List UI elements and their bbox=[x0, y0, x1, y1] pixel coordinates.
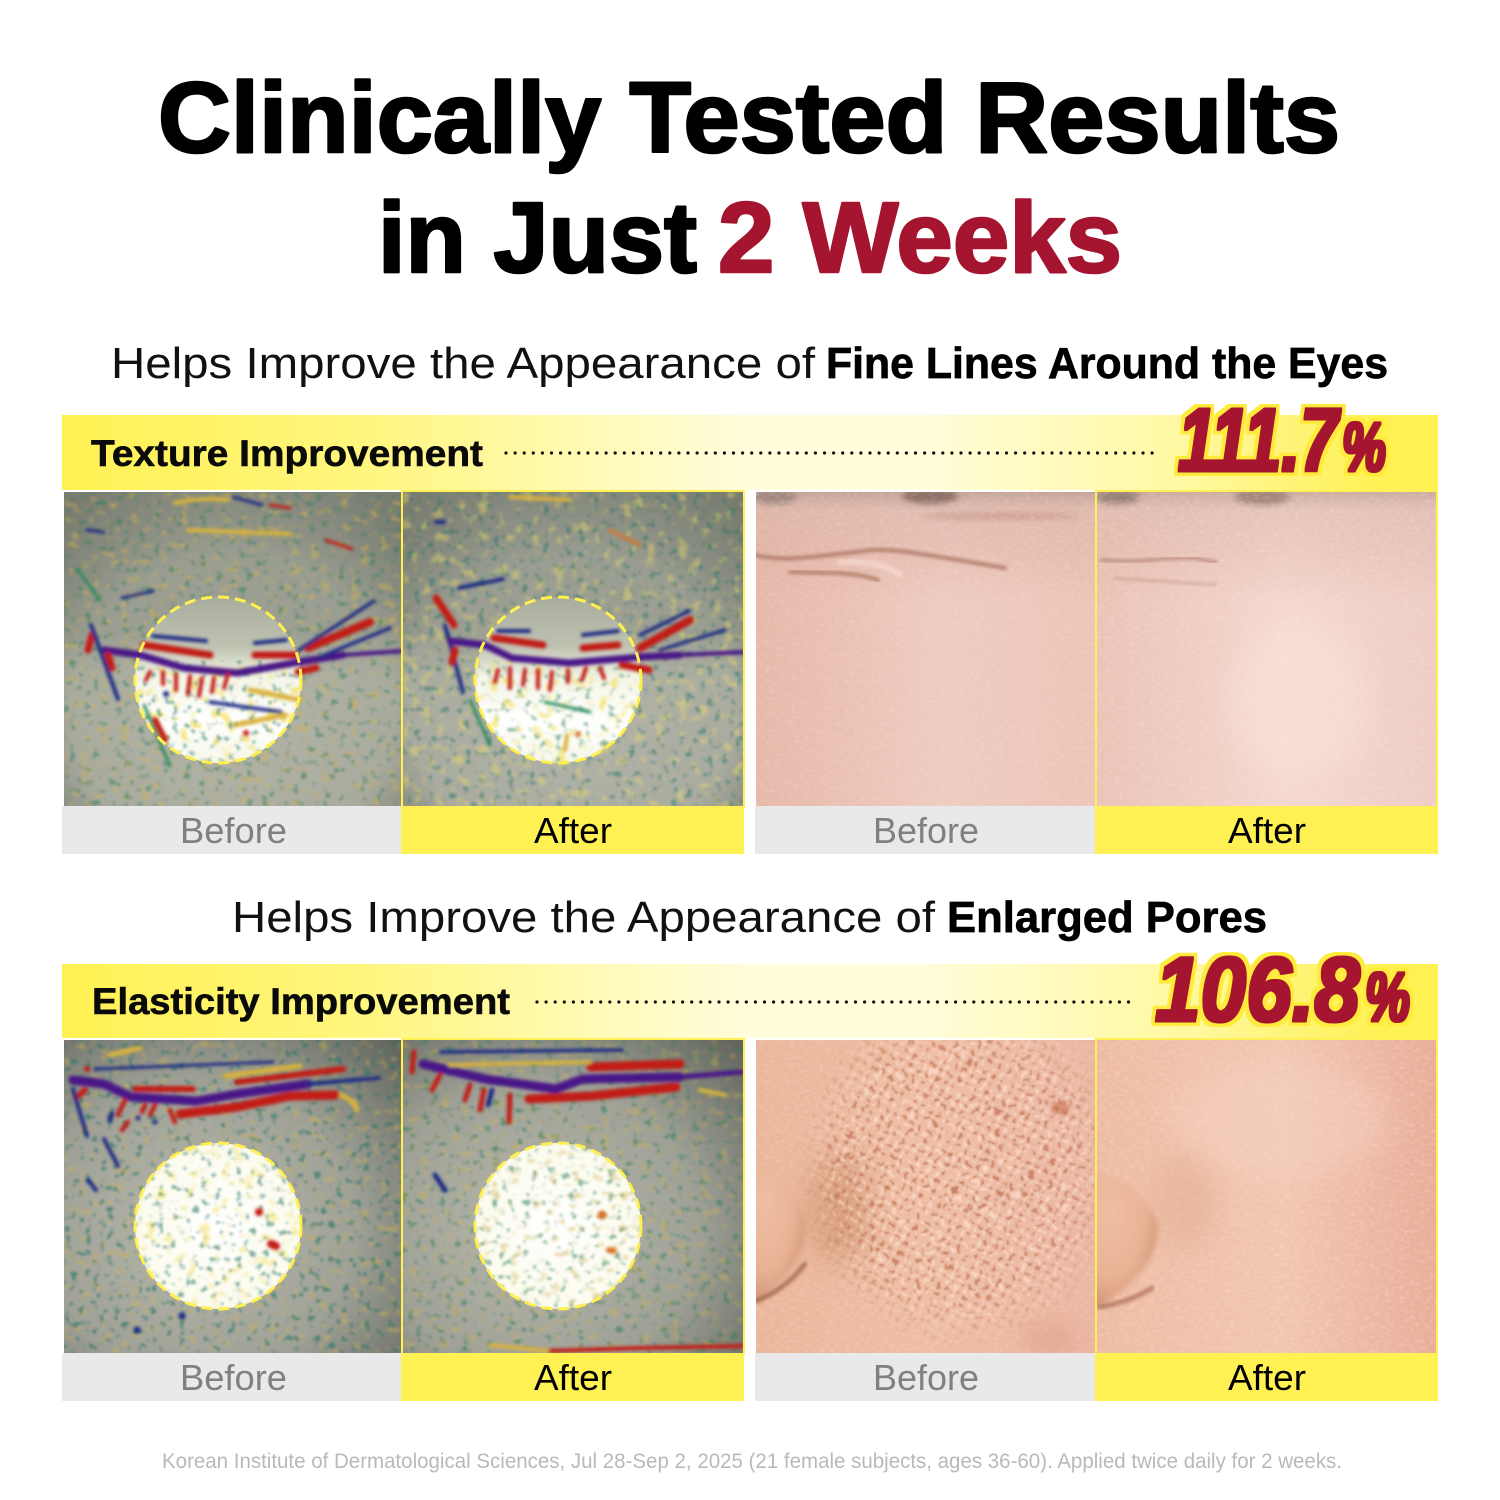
caption strip: texture before skin: Before bbox=[873, 810, 979, 851]
magnifier ring bbox=[475, 597, 641, 763]
stat: 111.7%: 111.7 bbox=[1178, 391, 1341, 491]
caption strip: pores after skin bbox=[1095, 1353, 1438, 1401]
title: 2 Weeks bbox=[718, 182, 1122, 294]
subheading: fine lines: Fine Lines Around the Eyes bbox=[826, 339, 1388, 388]
caption strip: texture before map: Before bbox=[180, 810, 287, 851]
panel: texture after map bbox=[403, 492, 746, 806]
caption strip: pores before skin bbox=[755, 1353, 1095, 1401]
panel: pores before skin photo bbox=[745, 1040, 1095, 1354]
caption strip: pores after skin: After bbox=[1228, 1357, 1306, 1398]
subheading: enlarged pores: Helps Improve the Appearance of bbox=[232, 893, 936, 942]
label: texture improvement: Texture Improvement bbox=[91, 433, 483, 474]
icon: nose wing bbox=[756, 1169, 808, 1306]
caption strip: elasticity before map: Before bbox=[180, 1357, 287, 1398]
magnifier ring bbox=[475, 1143, 641, 1309]
panel: pores after skin photo bbox=[1086, 1040, 1436, 1353]
result bar: texture improvement bbox=[62, 391, 1438, 491]
stat: 106.8%: % bbox=[1365, 958, 1410, 1036]
panel: texture before map bbox=[64, 492, 403, 806]
magnifier ring bbox=[135, 1143, 301, 1309]
caption strip: texture after map: After bbox=[534, 810, 612, 851]
icon: nose wing bbox=[1097, 1174, 1160, 1311]
label: elasticity improvement: Elasticity Improvement bbox=[92, 981, 510, 1022]
panel: texture after skin photo bbox=[1096, 489, 1436, 806]
result bar: elasticity improvement bbox=[62, 939, 1438, 1041]
magnifier ring bbox=[135, 597, 301, 763]
title: Clinically Tested Results bbox=[158, 62, 1340, 174]
caption strip: texture after skin bbox=[1095, 806, 1438, 854]
stat: 106.8%: 106.8 bbox=[1155, 939, 1361, 1041]
after panel frame lines bbox=[402, 491, 1437, 1354]
panel: elasticity before map bbox=[64, 1040, 401, 1353]
caption strip: elasticity after map bbox=[401, 1353, 744, 1401]
subheading: enlarged pores bbox=[232, 893, 1267, 942]
caption strip: pores before skin: Before bbox=[873, 1357, 979, 1398]
caption strip: texture after map bbox=[401, 806, 744, 854]
panel: elasticity after map bbox=[403, 1040, 743, 1353]
subheading: fine lines: Helps Improve the Appearance of bbox=[111, 339, 816, 388]
caption strip: texture before map bbox=[62, 806, 401, 854]
footnote: Korean Institute of Dermatological Sciences, Jul 28-Sep 2, 2025 (21 female subjects, ages 36-60). Applied twice daily for 2 weeks. bbox=[162, 1450, 1342, 1473]
title: in Just bbox=[378, 182, 697, 294]
panel: texture before skin photo bbox=[753, 488, 1095, 806]
title bbox=[158, 62, 1340, 294]
subheading: enlarged pores: Enlarged Pores bbox=[947, 893, 1267, 942]
subheading: fine lines bbox=[111, 339, 1388, 388]
caption strip: texture after skin: After bbox=[1228, 810, 1306, 851]
caption strip: texture before skin bbox=[755, 806, 1095, 854]
stat: 111.7%: % bbox=[1342, 408, 1386, 486]
caption strip: elasticity after map: After bbox=[534, 1357, 612, 1398]
caption strip: elasticity before map bbox=[62, 1353, 401, 1401]
